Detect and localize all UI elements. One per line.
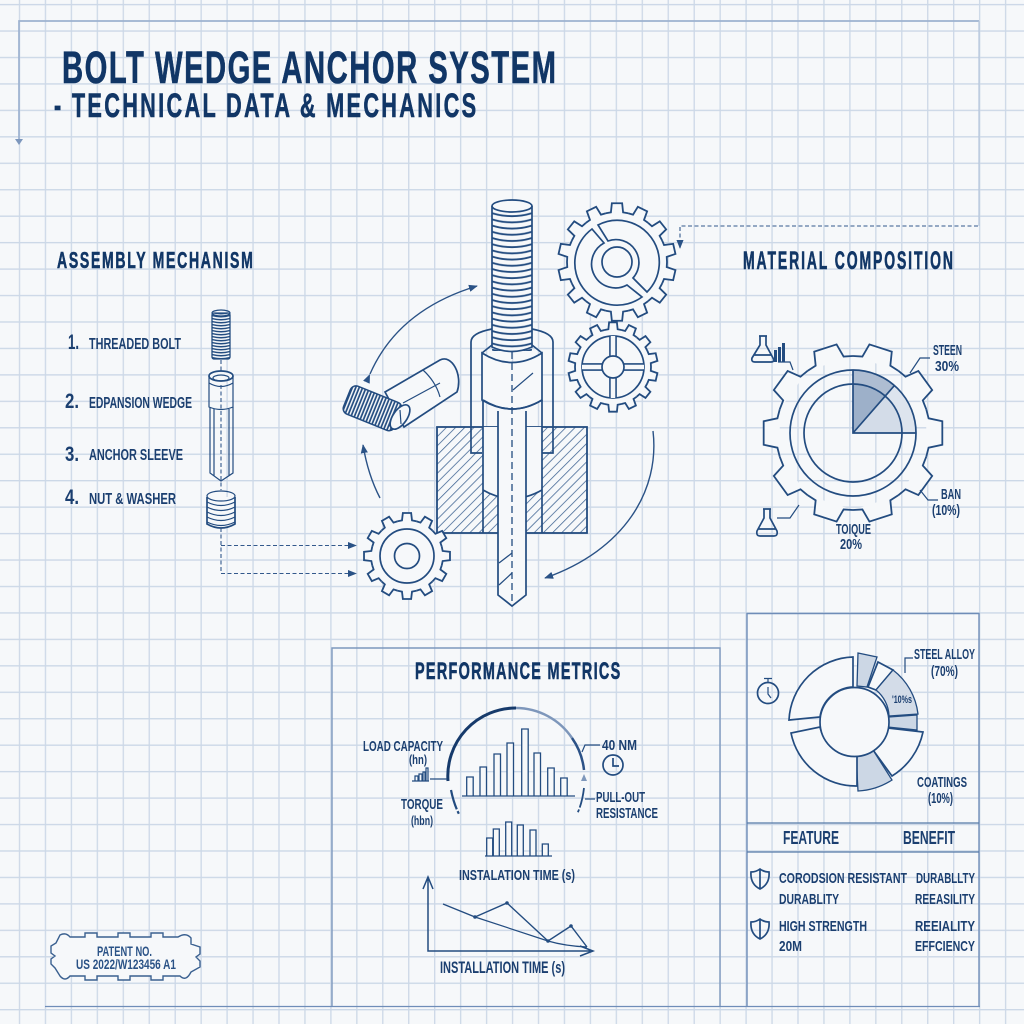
row: high strength: EFFCIENCY <box>915 938 975 955</box>
rotation arrows <box>363 286 654 578</box>
gear pie chart <box>764 341 942 525</box>
panel border <box>332 648 720 1006</box>
detached threaded cylinder <box>341 359 459 433</box>
parts list: 2. <box>65 390 79 413</box>
label: coatings 10%: (10%) <box>928 790 953 807</box>
label: torque <box>401 796 443 828</box>
label: ban 10%: (10%) <box>932 502 960 519</box>
icon: small gear <box>364 513 450 599</box>
threaded bolt <box>492 200 532 352</box>
parts list: ANCHOR SLEEVE <box>89 447 183 464</box>
label: installation time upper: INSTALATION TIME (s) <box>459 867 575 884</box>
table header <box>783 828 955 848</box>
row: corrosion resistant: DURABLITY <box>779 891 839 908</box>
label: torque 20%: 20% <box>840 536 862 553</box>
label: pull-out resistance: RESISTANCE <box>596 805 658 822</box>
panel: donut chart and feature table <box>747 614 979 1006</box>
label: steen 30%: STEEN <box>933 342 962 359</box>
patent stamp: US 2022/W123456 A1 <box>76 956 176 972</box>
icon: stopwatch <box>758 678 778 704</box>
dashed callout arrow <box>680 226 978 248</box>
row: high strength: REEIALITY <box>915 918 975 935</box>
label: steel alloy 70%: STEEL ALLOY <box>914 646 975 663</box>
label: coatings 10% <box>917 774 967 807</box>
parts list <box>65 331 192 509</box>
patent stamp <box>51 933 200 980</box>
parts list: EDPANSION WEDGE <box>89 395 192 412</box>
panel: assembly mechanism <box>57 249 356 574</box>
label: torque 20%: TOIQUE <box>836 521 871 538</box>
title: BOLT WEDGE ANCHOR SYSTEM <box>62 44 556 94</box>
gauge arc <box>448 708 587 816</box>
label: torque 20% <box>836 521 871 553</box>
label: ban 10%: BAN <box>941 486 961 503</box>
patent stamp: PATENT NO. <box>97 943 152 959</box>
exploded parts drawing <box>207 310 235 528</box>
label: 40 nm with clock icon: 40 NM <box>602 737 637 754</box>
label: torque: (hbn) <box>411 813 433 828</box>
table header: FEATURE <box>783 828 839 848</box>
row: corrosion resistant: CORODSION RESISTANT <box>779 870 907 887</box>
parts list: 1. <box>68 331 79 354</box>
row: high strength: 20M <box>779 938 802 955</box>
panel border <box>747 614 979 1006</box>
icon: flask with bars <box>752 336 793 370</box>
anchor sleeve <box>471 329 553 453</box>
row: corrosion resistant <box>751 869 975 908</box>
axis label: installation time: INSTALLATION TIME (s) <box>440 958 565 977</box>
bore hole <box>483 427 542 498</box>
central anchor assembly <box>437 200 587 606</box>
bar chart: installation time <box>485 822 552 856</box>
row: high strength: HIGH STRENGTH <box>779 918 867 935</box>
bolt shank and tip <box>498 411 526 606</box>
label: pull-out resistance: PULL-OUT <box>596 789 645 806</box>
label: steel alloy 70%: (70%) <box>931 663 958 680</box>
bore walls <box>483 400 542 533</box>
parts list: 4. <box>65 486 79 509</box>
icon: flask <box>757 505 799 536</box>
label: pull-out resistance <box>585 789 658 822</box>
parts list: NUT & WASHER <box>89 491 176 508</box>
panel: material composition <box>680 226 978 553</box>
feature table <box>747 823 979 955</box>
label: ban 10% <box>920 486 961 519</box>
row: corrosion resistant: REEASILITY <box>915 891 975 908</box>
donut chart <box>789 653 923 791</box>
label: inner percent: '10%s <box>892 694 912 706</box>
title <box>54 44 556 125</box>
label: steen 30% <box>910 342 962 375</box>
table header: BENEFIT <box>903 828 955 848</box>
heading: material composition: MATERIAL COMPOSITION <box>743 248 953 275</box>
label: load capacity: LOAD CAPACITY <box>363 738 443 755</box>
row: corrosion resistant: DURABLLTY <box>916 870 975 887</box>
bar chart: gauge bars <box>462 729 575 796</box>
heading: assembly mechanism: ASSEMBLY MECHANISM <box>57 249 253 274</box>
label: 40 nm with clock icon <box>582 737 637 775</box>
icon: spoked gear <box>568 322 658 412</box>
parts list: THREADED BOLT <box>89 336 181 353</box>
label: steel alloy 70% <box>905 646 975 680</box>
label: coatings 10%: COATINGS <box>917 774 967 791</box>
hatched concrete block <box>437 427 587 533</box>
heading: performance metrics: PERFORMANCE METRICS <box>415 658 620 685</box>
label: torque: TORQUE <box>401 796 443 813</box>
dashed arrows to gear <box>221 528 356 574</box>
line chart <box>423 877 593 956</box>
expansion collar <box>482 353 542 409</box>
parts list: 3. <box>65 443 79 466</box>
title: - TECHNICAL DATA & MECHANICS <box>54 87 476 125</box>
icon: large gear <box>557 203 677 321</box>
label: load capacity <box>363 738 447 781</box>
label: steen 30%: 30% <box>935 358 959 375</box>
row: high strength <box>751 918 975 955</box>
panel: performance metrics <box>332 648 720 1006</box>
label: load capacity: (hn) <box>409 752 427 767</box>
